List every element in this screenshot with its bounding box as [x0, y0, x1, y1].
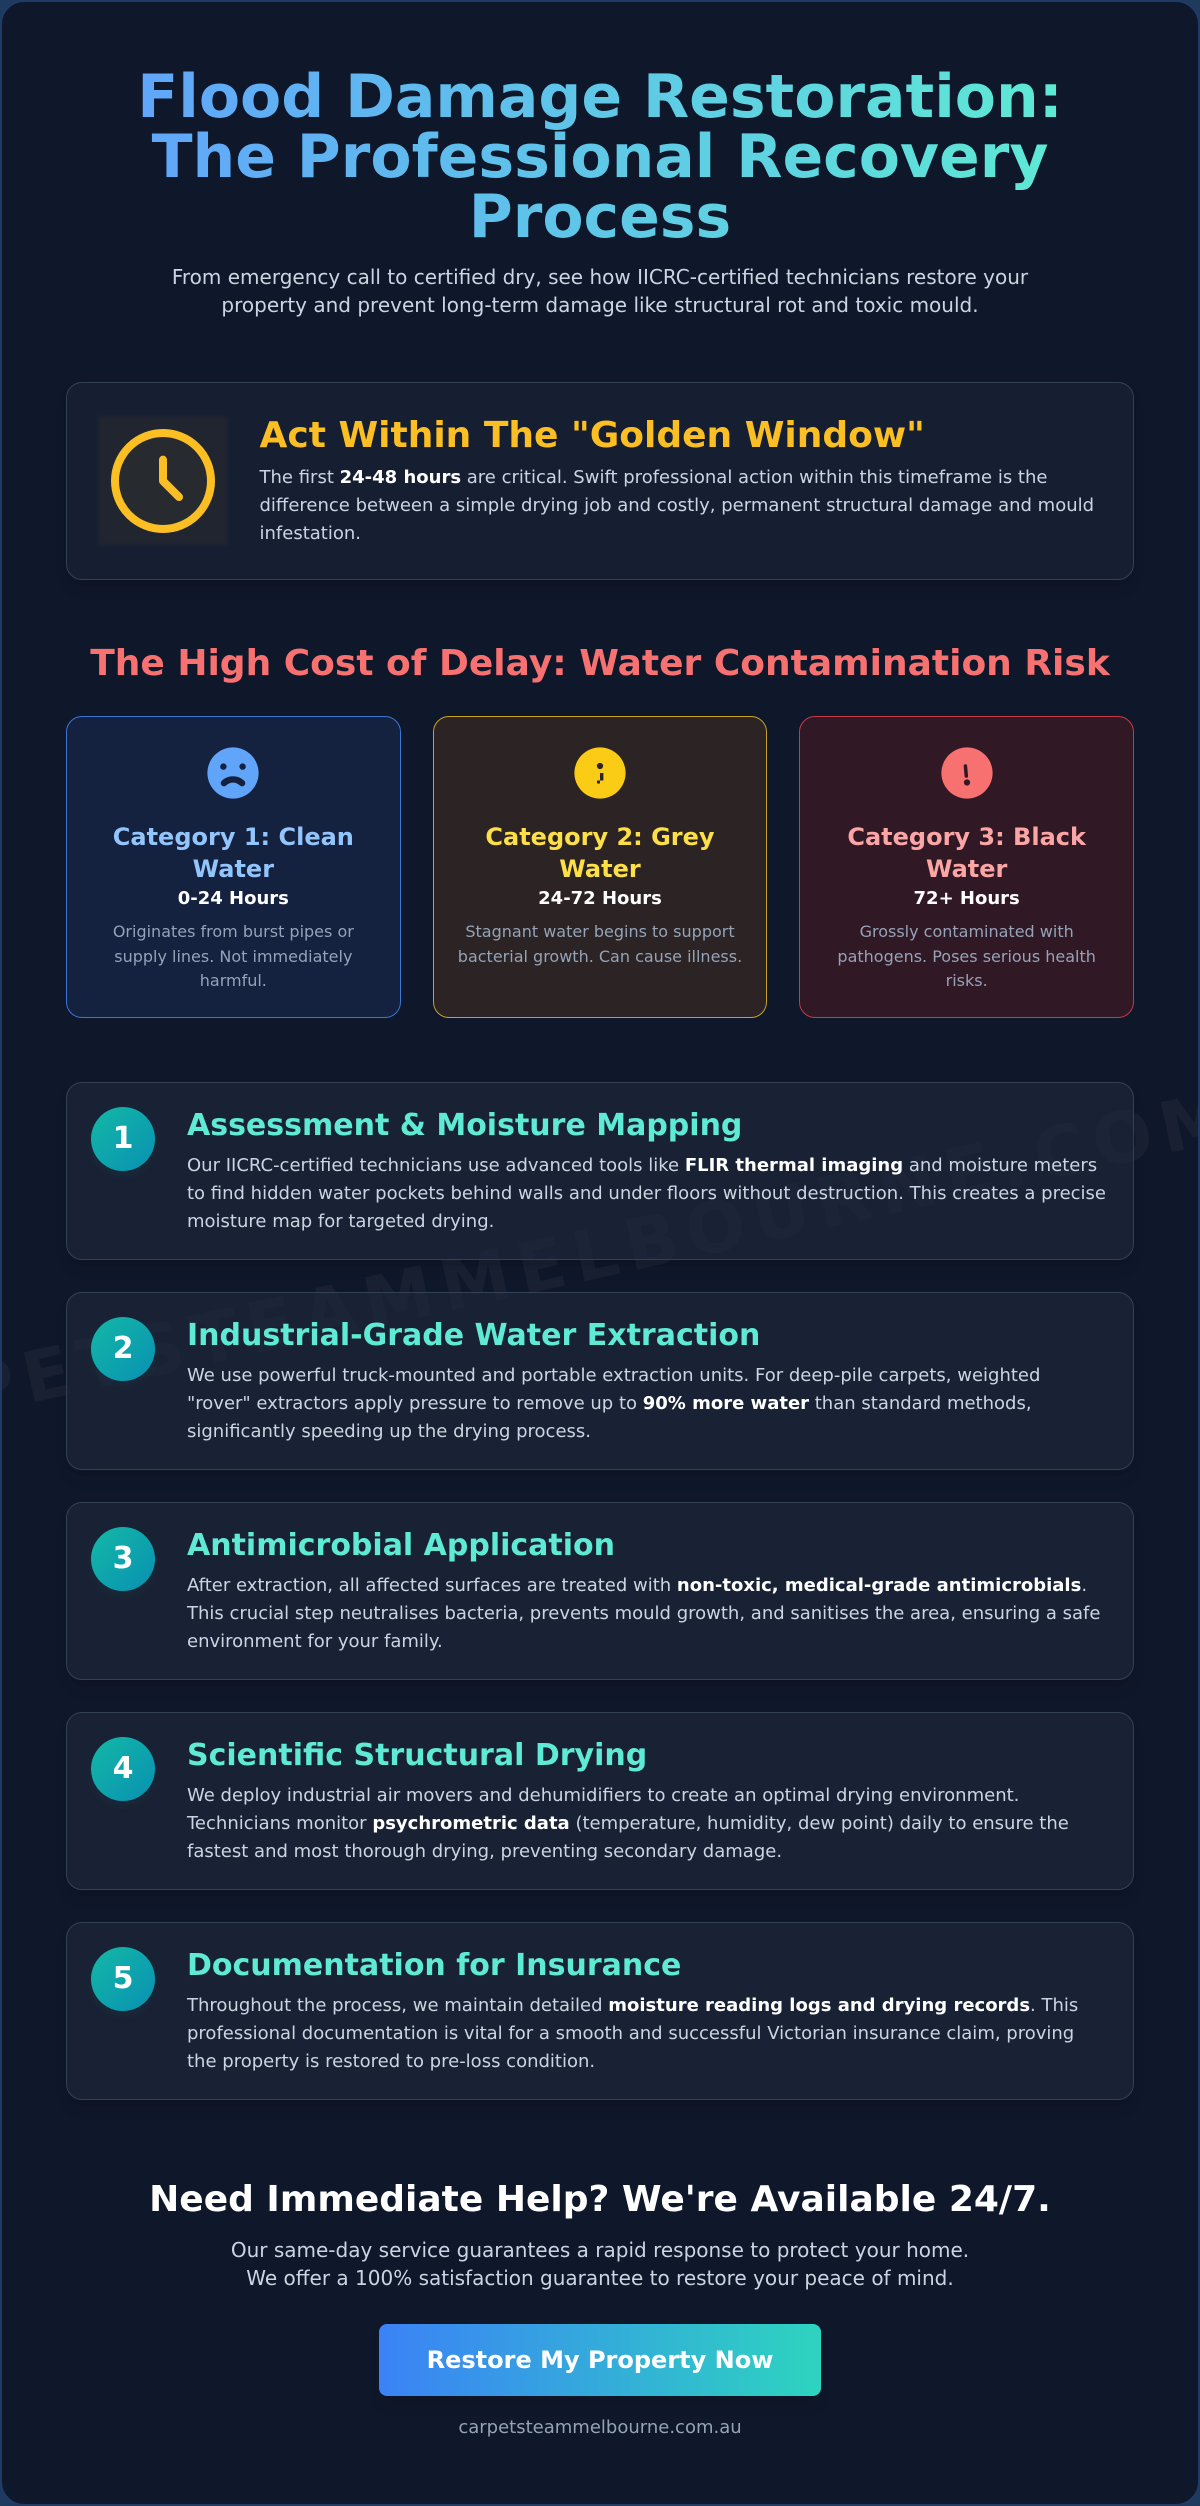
step 1 text: moisture map for targeted drying. — [187, 1210, 494, 1232]
category 3 title — [847, 822, 1086, 882]
step 1 text — [187, 1154, 1106, 1232]
category 2 title — [485, 822, 715, 882]
text: golden window: The first 24-48 hours are critical. Swift professional action within this timeframe is the — [260, 467, 1047, 488]
subtitle: property and prevent long-term damage like structural rot and toxic mould. — [221, 293, 979, 317]
text: golden window — [259, 467, 1094, 544]
category 1 description — [113, 922, 354, 990]
panel: category 2 — [433, 716, 767, 1018]
panel: category 3 — [799, 716, 1134, 1018]
category 3 title: Category 3: Black — [847, 822, 1086, 850]
footer url: carpetsteammelbourne.com.au — [458, 2417, 742, 2438]
text: call to action — [231, 2238, 969, 2290]
icon: sad face — [207, 747, 259, 799]
step 5 text: Throughout the process, we maintain detailed moisture reading logs and drying records. This — [187, 1994, 1078, 2016]
icon: yellow indicator — [574, 747, 626, 799]
title: The Professional Recovery — [152, 122, 1048, 192]
panel: step 1 — [66, 1082, 1134, 1260]
step 1 text: Our IICRC-certified technicians use advanced tools like FLIR thermal imaging and moisture meters — [187, 1154, 1097, 1176]
step 2 text — [187, 1364, 1040, 1442]
step 3 text: After extraction, all affected surfaces are treated with non-toxic, medical-grade antimicrobials. — [187, 1574, 1087, 1596]
category 3 description: Grossly contaminated with — [860, 922, 1074, 941]
button: restore my property: Restore My Property Now — [427, 2346, 773, 2374]
category 1 description: harmful. — [200, 971, 267, 990]
step 2 number: 2 — [113, 1331, 133, 1366]
heading: golden window: Act Within The "Golden Window" — [260, 414, 925, 456]
step 3 text: This crucial step neutralises bacteria, prevents mould growth, and sanitises the area, ensuring a safe — [187, 1602, 1100, 1624]
step 3 number — [91, 1527, 155, 1591]
step 3 title: Antimicrobial Application — [187, 1528, 615, 1563]
panel: step 5 — [66, 1922, 1134, 2100]
step 4 text: Technicians monitor psychrometric data (temperature, humidity, dew point) daily to ensure the — [187, 1812, 1069, 1834]
icon: exclamation — [941, 747, 993, 799]
step 4 number: 4 — [113, 1751, 133, 1786]
step 5 text: professional documentation is vital for a smooth and successful Victorian insurance claim, proving — [187, 2022, 1074, 2044]
category 3 description: risks. — [946, 971, 988, 990]
panel: golden window — [66, 382, 1134, 580]
subtitle: From emergency call to certified dry, see how IICRC-certified technicians restore your — [172, 265, 1028, 289]
step 1 number: 1 — [113, 1121, 133, 1156]
step 2 text: significantly speeding up the drying process. — [187, 1420, 591, 1442]
category 3 description — [837, 922, 1096, 990]
step 4 text: fastest and most thorough drying, preventing secondary damage. — [187, 1840, 782, 1862]
step 1 title: Assessment & Moisture Mapping — [187, 1108, 742, 1143]
category 1 description: supply lines. Not immediately — [114, 946, 352, 966]
title: Process — [469, 182, 731, 252]
category 3 title: Water — [926, 854, 1007, 882]
text: golden window: difference between a simple drying job and costly, permanent structural damage and mould — [260, 495, 1094, 516]
step 3 text — [186, 1574, 1100, 1652]
title: Flood Damage Restoration: — [137, 62, 1063, 132]
category 3 time: 72+ Hours — [914, 888, 1020, 909]
category 1 description: Originates from burst pipes or — [113, 922, 354, 941]
step 4 text: We deploy industrial air movers and dehumidifiers to create an optimal drying environment. — [187, 1784, 1019, 1806]
button: restore my property — [379, 2324, 821, 2396]
step 5 text — [186, 1994, 1078, 2072]
category 3 description: pathogens. Poses serious health — [837, 946, 1096, 966]
step 5 number: 5 — [113, 1961, 133, 1996]
text: call to action: We offer a 100% satisfaction guarantee to restore your peace of mind. — [246, 2266, 954, 2290]
text: call to action: Our same-day service guarantees a rapid response to protect your home. — [231, 2238, 969, 2262]
step 1 number — [91, 1107, 155, 1171]
category 2 description — [458, 922, 742, 966]
step 5 title: Documentation for Insurance — [187, 1948, 681, 1983]
category 2 title: Category 2: Grey — [485, 822, 715, 850]
step 5 text: the property is restored to pre-loss condition. — [187, 2050, 595, 2072]
heading: cost of delay: The High Cost of Delay: Water Contamination Risk — [90, 643, 1110, 684]
category 1 title: Water — [193, 854, 274, 882]
step 5 number — [91, 1947, 155, 2011]
step 3 number: 3 — [113, 1541, 133, 1576]
step 2 title: Industrial-Grade Water Extraction — [187, 1318, 760, 1353]
category 2 time: 24-72 Hours — [538, 888, 662, 909]
step 2 number — [91, 1317, 155, 1381]
category 2 title: Water — [559, 854, 641, 882]
step 3 text: environment for your family. — [187, 1630, 443, 1652]
category 1 title — [113, 822, 354, 882]
panel: step 2 — [66, 1292, 1134, 1470]
step 4 text — [186, 1784, 1069, 1862]
text: golden window: infestation. — [260, 523, 361, 544]
title — [130, 67, 1070, 247]
step 2 text: "rover" extractors apply pressure to remove up to 90% more water than standard methods, — [187, 1392, 1032, 1414]
subtitle — [172, 265, 1028, 317]
panel: step 4 — [66, 1712, 1134, 1890]
panel: category 1 — [66, 716, 401, 1018]
step 4 number — [91, 1737, 155, 1801]
step 1 text: to find hidden water pockets behind walls and under floors without destruction. This creates a precise — [187, 1182, 1106, 1204]
step 2 text: We use powerful truck-mounted and portable extraction units. For deep-pile carpets, weighted — [187, 1364, 1040, 1386]
heading: call to action: Need Immediate Help? We're Available 24/7. — [149, 2179, 1051, 2220]
category 2 description: Stagnant water begins to support — [465, 922, 735, 941]
step 4 title: Scientific Structural Drying — [187, 1738, 647, 1773]
panel: step 3 — [66, 1502, 1134, 1680]
category 2 description: bacterial growth. Can cause illness. — [458, 946, 742, 966]
icon: clock — [101, 419, 225, 543]
category 1 title: Category 1: Clean — [113, 822, 354, 850]
category 1 time: 0-24 Hours — [178, 888, 289, 909]
